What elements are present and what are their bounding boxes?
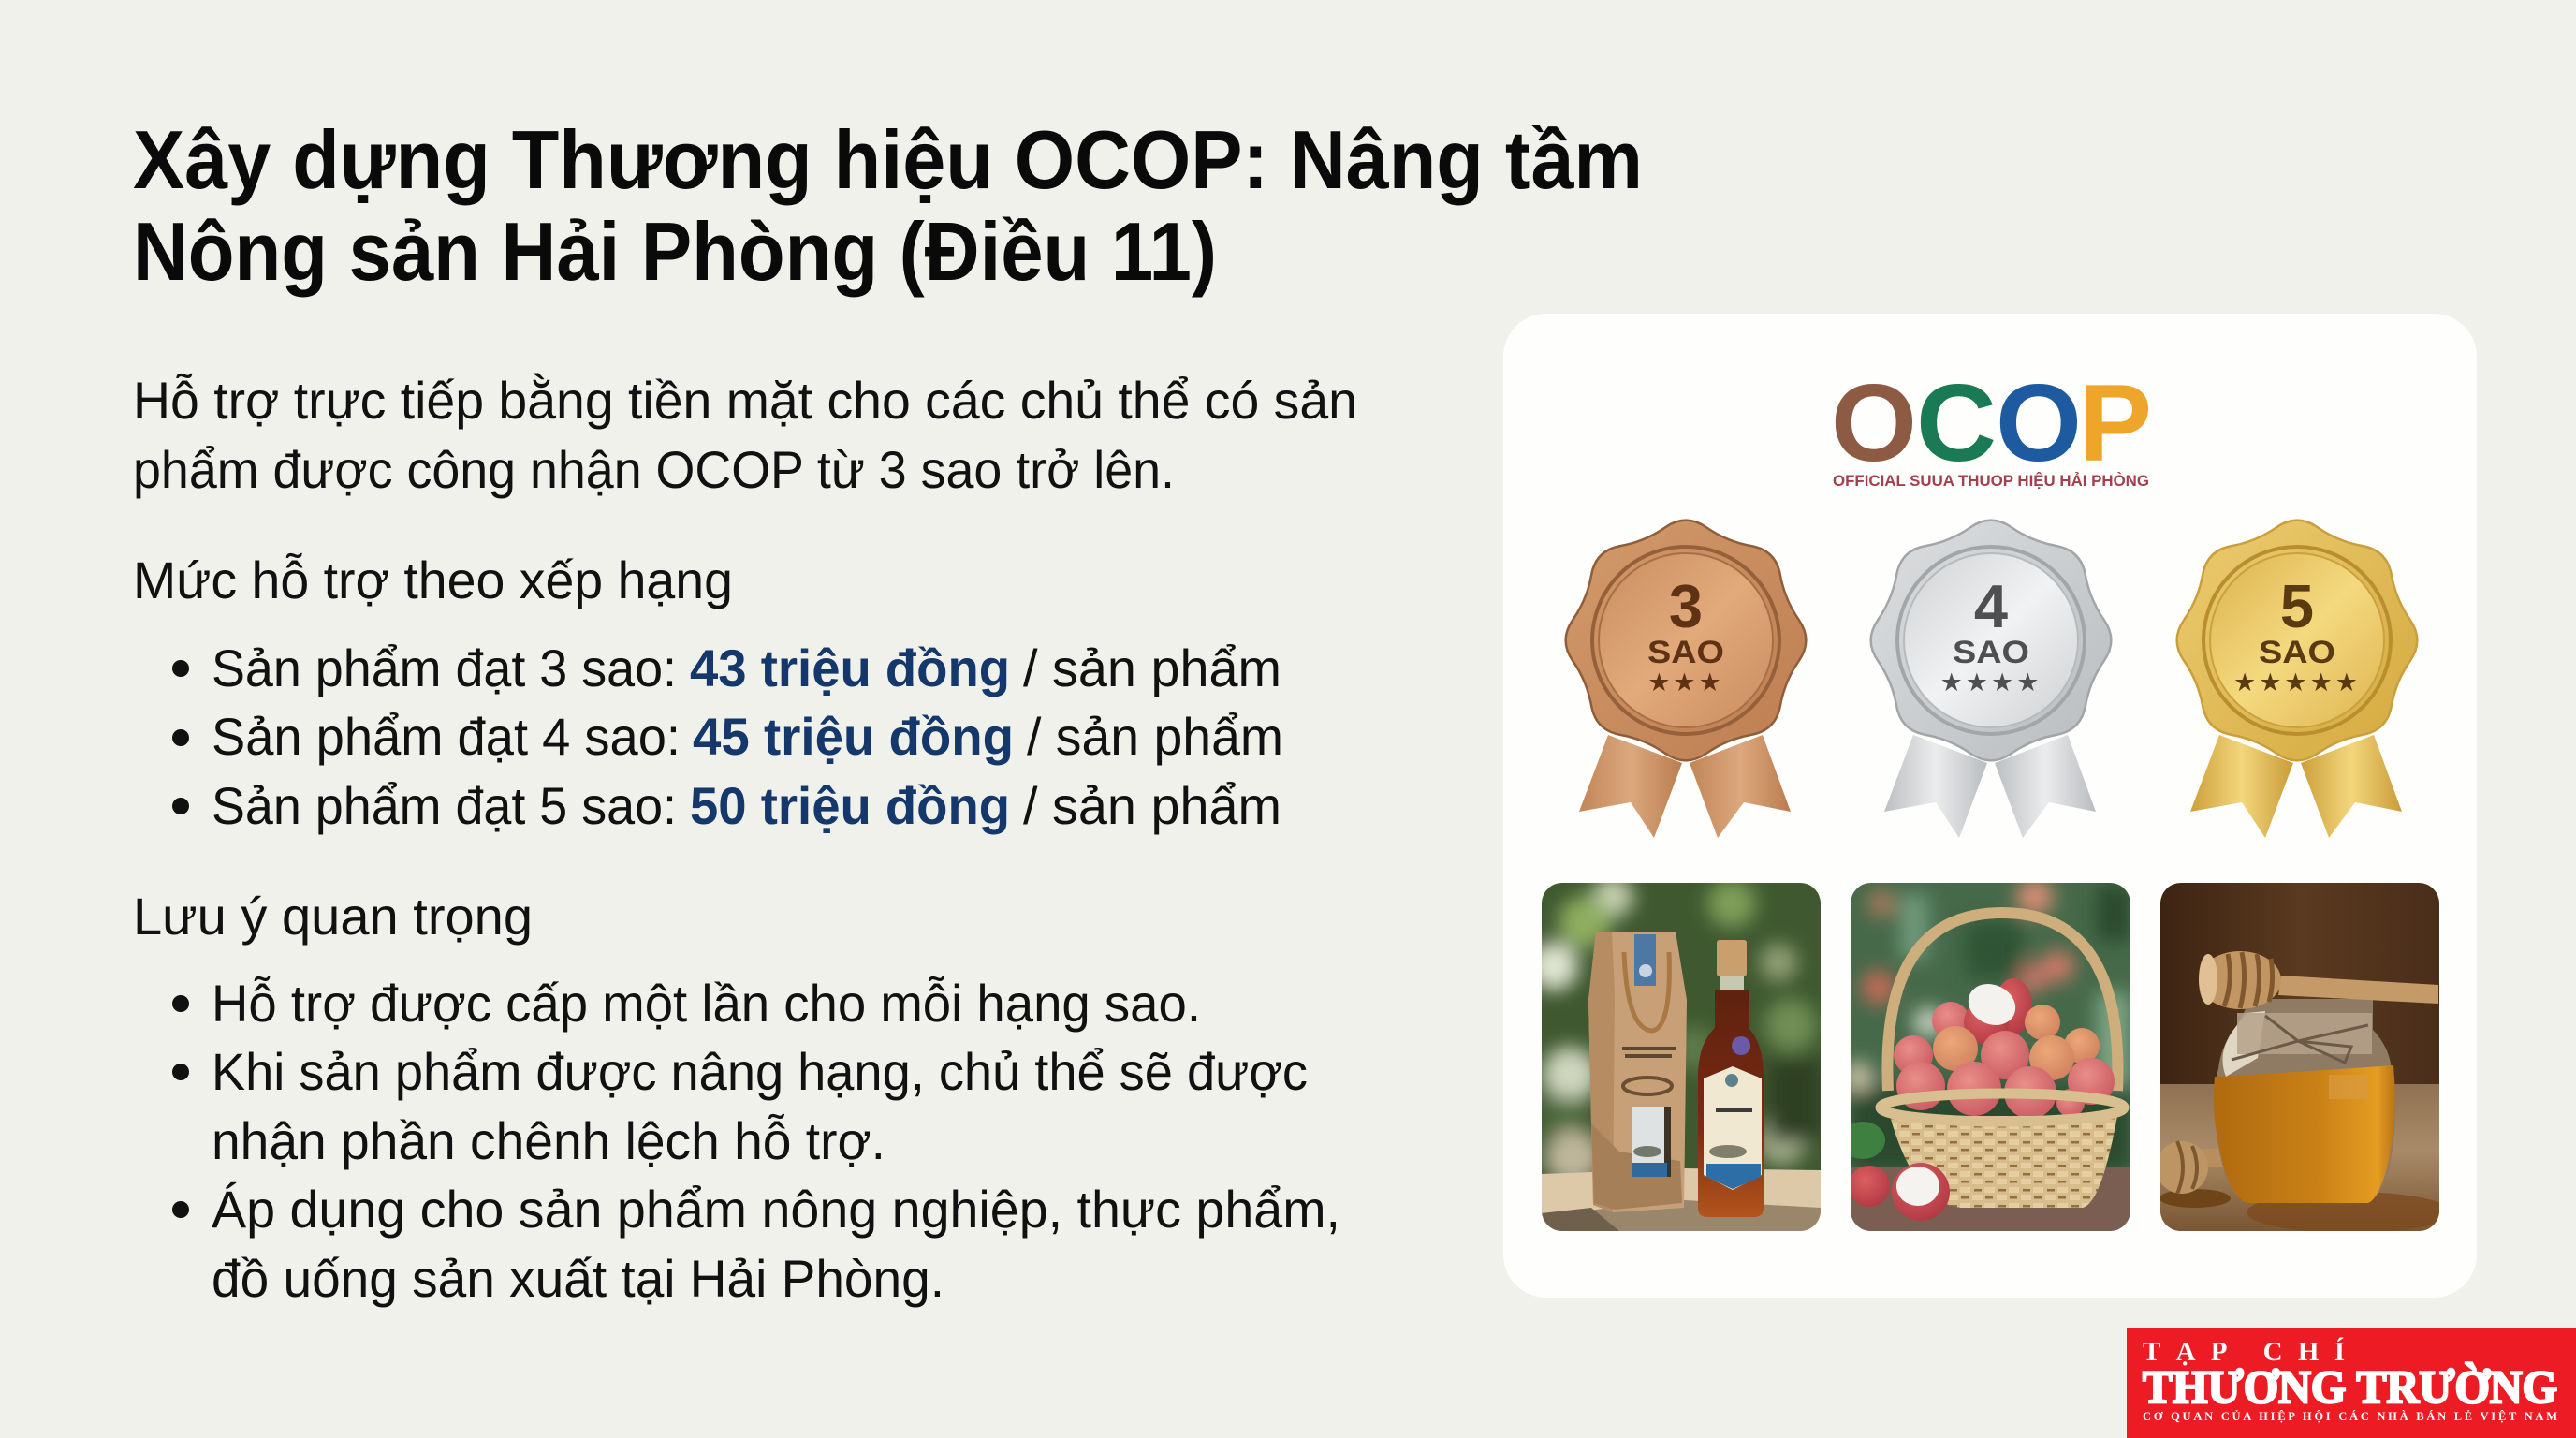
OCOP logo: OFFICIAL SUUA THUOP HIỆU HẢI PHÒNG [1833, 472, 2149, 490]
list: important notes [172, 974, 1340, 1308]
medal: 3 stars bronze [1566, 521, 1806, 838]
list: important notes: đồ uống sản xuất tại Hải Phòng. [212, 1249, 944, 1308]
medal: 4 stars silver [1871, 521, 2111, 838]
medal: 5 stars gold: ★★★★★ [2233, 668, 2361, 697]
medal: 3 stars bronze: ★★★ [1647, 668, 1724, 697]
photo: bottled product with kraft gift box [1530, 876, 1821, 1231]
photo: honey jar with wooden dipper [2156, 883, 2452, 1233]
medal: 3 stars bronze: 3 [1669, 572, 1703, 640]
list: important notes: Áp dụng cho sản phẩm nông nghiệp, thực phẩm, [212, 1180, 1340, 1239]
OCOP logo: P [2079, 361, 2152, 484]
medal: 5 stars gold [2177, 521, 2417, 838]
title [133, 113, 1643, 298]
OCOP logo: C [1916, 361, 1997, 484]
OCOP logo: O [1831, 361, 1917, 484]
OCOP logo [1831, 361, 2152, 490]
intro paragraph: Hỗ trợ trực tiếp bằng tiền mặt cho các chủ thể có sản [133, 371, 1357, 430]
list: support amounts by star rating: / sản phẩm [1027, 707, 1283, 766]
medal: 5 stars gold: 5 [2280, 572, 2314, 640]
list: support amounts by star rating: 43 triệu đồng [690, 638, 1010, 697]
medal: 4 stars silver: ★★★★ [1940, 668, 2042, 697]
medal: 4 stars silver: 4 [1974, 572, 2008, 640]
list: important notes: Khi sản phẩm được nâng hạng, chủ thể sẽ được [212, 1042, 1308, 1101]
list: support amounts by star rating: / sản phẩm [1023, 776, 1281, 835]
logo: Tạp chí Thương Trường: CƠ QUAN CỦA HIỆP HỘI CÁC NHÀ BÁN LẺ VIỆT NAM [2143, 1410, 2557, 1423]
logo: Tạp chí Thương Trường: THƯƠNG TRƯỜNG [2143, 1360, 2557, 1413]
title: Nông sản Hải Phòng (Điều 11) [133, 205, 1217, 298]
OCOP logo: O [1996, 361, 2082, 484]
medal: 5 stars gold: SAO [2259, 635, 2335, 670]
medal: 3 stars bronze: SAO [1647, 635, 1724, 670]
list: support amounts by star rating: / sản phẩm [1023, 638, 1281, 697]
title: Xây dựng Thương hiệu OCOP: Nâng tầm [133, 113, 1643, 206]
logo: Tạp chí Thương Trường [2127, 1328, 2576, 1438]
list: support amounts by star rating: Sản phẩm đạt 5 sao: [212, 776, 677, 835]
list: important notes: nhận phần chênh lệch hỗ trợ. [212, 1111, 886, 1170]
photo: lychee basket [1840, 878, 2130, 1231]
list: support amounts by star rating: Sản phẩm đạt 4 sao: [212, 707, 681, 766]
panel: OCOP medals and products [1503, 314, 2477, 1298]
intro paragraph: phẩm được công nhận OCOP từ 3 sao trở lên. [133, 440, 1175, 499]
heading: important notes: Lưu ý quan trọng [133, 887, 533, 946]
list: important notes: Hỗ trợ được cấp một lần cho mỗi hạng sao. [212, 974, 1201, 1033]
medal: 4 stars silver: SAO [1953, 635, 2029, 670]
list: support amounts by star rating: 50 triệu đồng [690, 776, 1010, 835]
list: support amounts by star rating: Sản phẩm đạt 3 sao: [212, 638, 677, 697]
logo: Tạp chí Thương Trường: TẠP CHÍ [2143, 1336, 2345, 1367]
list: support amounts by star rating: 45 triệu đồng [693, 707, 1014, 766]
list: support amounts by star rating [172, 638, 1283, 835]
intro paragraph [133, 371, 1357, 499]
heading: support levels: Mức hỗ trợ theo xếp hạng [133, 550, 733, 609]
